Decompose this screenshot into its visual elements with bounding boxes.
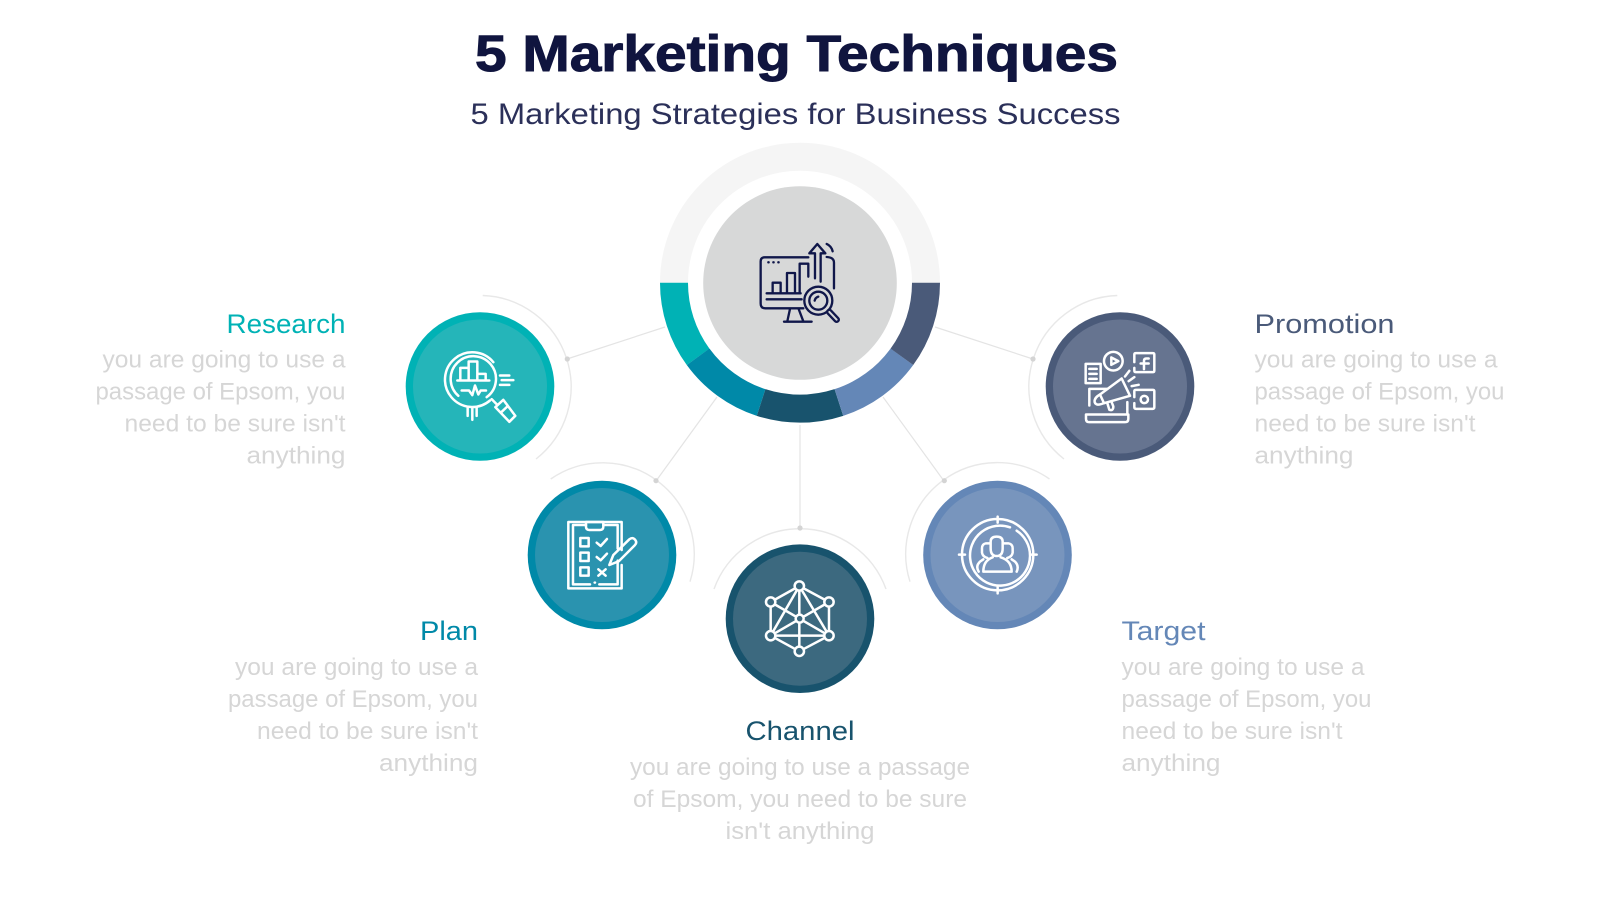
text block: Target: passage of Epsom, you: [1122, 686, 1372, 713]
title: 5 Marketing Techniques: [475, 25, 1118, 82]
text block: Research: passage of Epsom, you: [96, 379, 346, 406]
icon: network graph: [766, 581, 834, 656]
node: Plan: [528, 481, 676, 629]
text block: Research: need to be sure isn't: [124, 411, 346, 438]
text block: Channel: you are going to use a passage: [630, 754, 970, 781]
icon: magnifier over bar chart: [445, 352, 515, 422]
node: Target: [923, 481, 1072, 629]
text block: Channel: isn't anything: [726, 818, 874, 845]
node: Research: [406, 312, 554, 461]
text block: Channel: Channel: [746, 716, 854, 746]
text block: Channel: [630, 716, 970, 845]
text block: Target: Target: [1122, 616, 1206, 646]
text block: Plan: [228, 616, 479, 777]
text block: Plan: anything: [379, 750, 478, 777]
icon: monitor chart with magnifier: [761, 244, 837, 322]
subtitle: 5 Marketing Strategies for Business Success: [470, 98, 1120, 131]
central circle with analytics icon: [703, 186, 897, 380]
text block: Target: need to be sure isn't: [1122, 718, 1343, 745]
text block: Target: anything: [1122, 750, 1220, 777]
central segmented ring: [674, 157, 926, 409]
text block: Channel: of Epsom, you need to be sure: [633, 786, 967, 813]
text block: Plan: you are going to use a: [235, 654, 479, 681]
text block: Promotion: need to be sure isn't: [1254, 411, 1476, 438]
text block: Promotion: you are going to use a: [1254, 347, 1498, 374]
text block: Promotion: Promotion: [1254, 309, 1394, 339]
text block: Promotion: [1254, 309, 1504, 470]
text block: Plan: passage of Epsom, you: [228, 686, 478, 713]
node: Channel: [726, 544, 874, 693]
icon: audience in crosshair: [959, 517, 1037, 593]
text block: Research: you are going to use a: [102, 347, 346, 374]
icon: megaphone and social media: [1086, 352, 1154, 422]
text block: Target: you are going to use a: [1122, 654, 1365, 681]
text block: Plan: need to be sure isn't: [257, 718, 478, 745]
text block: Target: [1122, 616, 1372, 777]
connector lines and orbit arcs: [483, 296, 1117, 589]
text block: Research: anything: [246, 443, 346, 470]
text block: Promotion: anything: [1254, 443, 1354, 470]
text block: Research: [96, 309, 346, 470]
icon: clipboard checklist with pencil: [568, 522, 636, 588]
text block: Promotion: passage of Epsom, you: [1254, 379, 1504, 406]
node: Promotion: [1046, 312, 1194, 461]
text block: Plan: Plan: [420, 616, 478, 646]
text block: Research: Research: [226, 309, 346, 339]
